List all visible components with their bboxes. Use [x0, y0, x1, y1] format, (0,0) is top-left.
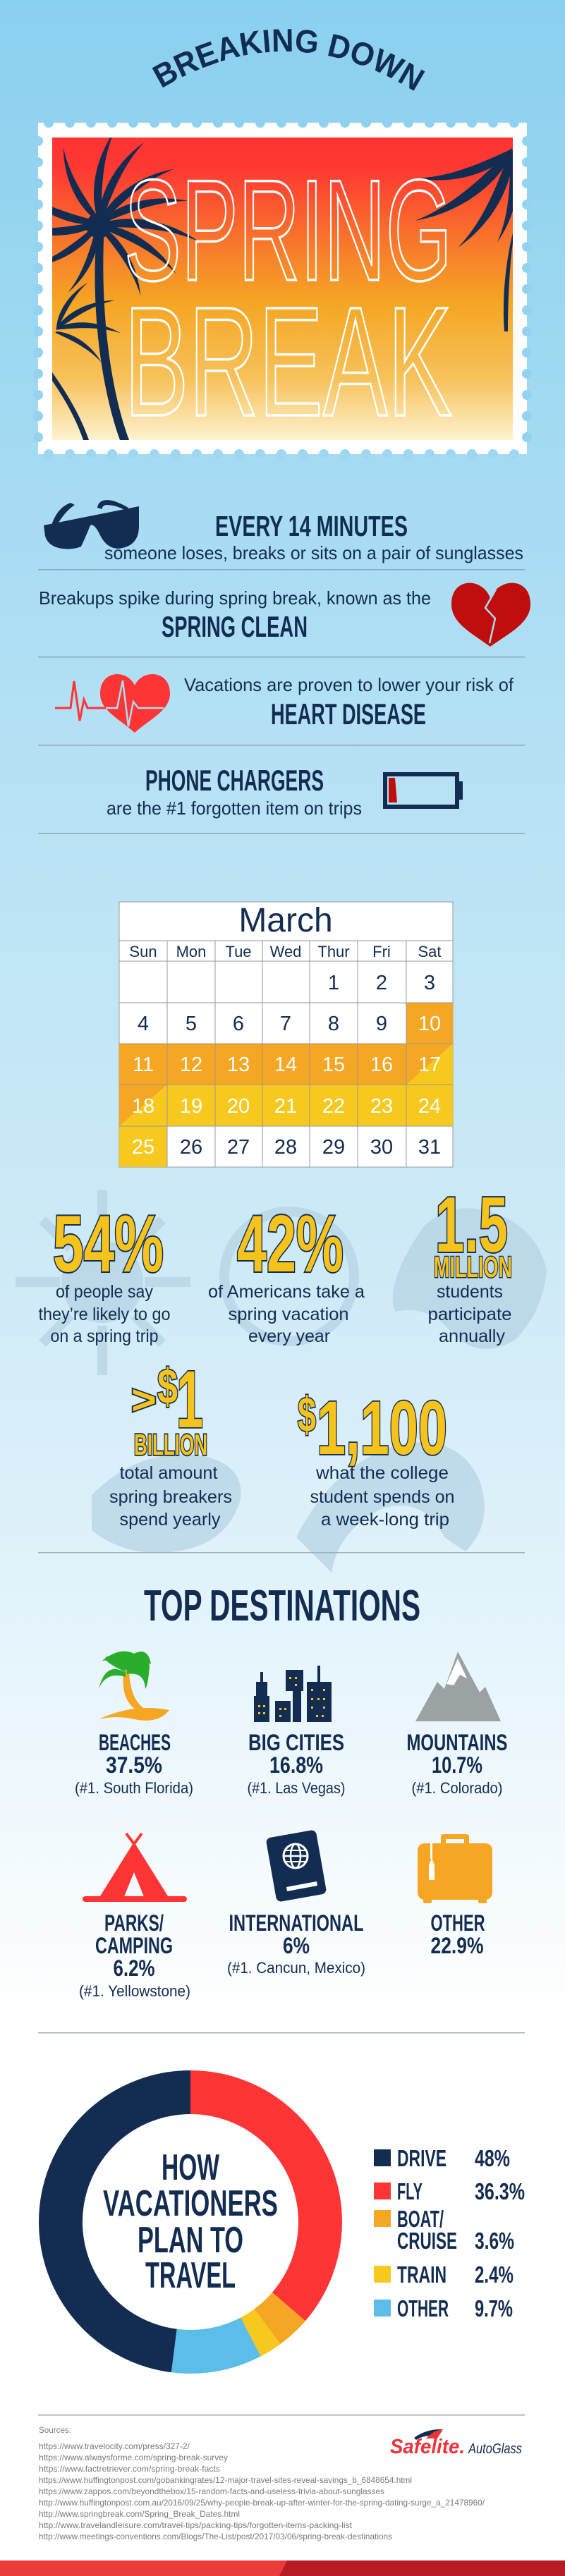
fact: phone chargers: are the #1 forgotten item on trips — [107, 798, 362, 819]
destination: international — [227, 1829, 365, 1977]
title: breaking down: BREAKING DOWN — [152, 29, 425, 91]
destination: beaches — [75, 1652, 193, 1797]
legend: TRAIN — [397, 2261, 446, 2288]
calendar: march: 30 — [370, 1136, 393, 1159]
icon: passport — [266, 1829, 327, 1903]
legend: 2.4% — [475, 2261, 514, 2288]
icon: broken heart — [451, 583, 530, 647]
calendar: march: 23 — [370, 1095, 393, 1118]
stat: $1,100: $ — [298, 1387, 316, 1442]
legend: BOAT/ — [397, 2206, 444, 2232]
calendar: march: 28 — [274, 1136, 297, 1159]
calendar: march: 7 — [280, 1013, 291, 1035]
sources: https://www.travelocity.com/press/327-2/ — [39, 2441, 190, 2451]
stat: 54%: of people say — [56, 1282, 153, 1302]
icon: tent with moon — [83, 1833, 187, 1902]
donut chart: how vacationers plan to travel: VACATIONERS — [103, 2183, 278, 2224]
calendar: march: Mon — [176, 943, 206, 960]
stat: >$1 billion: spring breakers — [109, 1487, 232, 1507]
destination: international: (#1. Cancun, Mexico) — [227, 1959, 365, 1977]
calendar: march: 14 — [274, 1054, 297, 1076]
logo: safelite autoglass: AutoGlass — [468, 2441, 522, 2457]
calendar: march: 3 — [424, 972, 435, 994]
calendar: march: 9 — [376, 1013, 387, 1035]
destination: parks/camping: 6.2% — [113, 1955, 155, 1981]
icon: mountain — [415, 1652, 501, 1721]
sources: http://www.meetings-conventions.com/Blogs/The-List/post/2017/03/06/spring-break-destinations — [39, 2532, 392, 2541]
calendar: march: 1 — [328, 972, 339, 994]
stat: 1.5 million: students — [437, 1282, 503, 1302]
calendar: march: 19 — [180, 1095, 202, 1118]
calendar: march: 17 — [418, 1054, 441, 1076]
legend — [374, 2145, 525, 2321]
stat: 42%: spring vacation — [229, 1305, 348, 1324]
calendar: march: Sun — [129, 943, 157, 960]
destination: mountains — [406, 1652, 508, 1797]
calendar: march: 21 — [274, 1095, 297, 1118]
fact: heart disease — [55, 674, 514, 733]
stat: 1.5 million: annually — [439, 1326, 505, 1346]
fact: heart disease: Vacations are proven to lower your risk of — [184, 674, 514, 695]
stat: 42%: 42% — [237, 1200, 344, 1289]
sources: http://www.springbreak.com/Spring_Break_Dates.html — [39, 2509, 240, 2519]
stamp: spring break — [6, 118, 532, 459]
fact: spring clean: SPRING CLEAN — [162, 610, 308, 643]
icon: palm tree — [99, 1652, 169, 1721]
destination: other: OTHER — [430, 1910, 485, 1936]
icon: low battery — [385, 774, 463, 807]
destination: parks/camping — [79, 1833, 190, 2000]
calendar: march: 29 — [322, 1136, 345, 1159]
calendar: march — [119, 902, 453, 1167]
destination: big cities: 16.8% — [269, 1752, 323, 1778]
stat: 54% — [38, 1200, 171, 1346]
calendar: march: 5 — [186, 1013, 197, 1035]
sources: https://www.huffingtonpost.com/gobankingrates/12-major-travel-sites-reveal-savings_b_6848654.html — [39, 2475, 412, 2485]
icon: sunglasses — [44, 500, 139, 549]
stat: 54%: on a spring trip — [51, 1326, 158, 1346]
stat: >$1 billion: 1 — [176, 1355, 203, 1445]
calendar: march: March — [238, 902, 333, 939]
stat: 54%: they’re likely to go — [38, 1305, 171, 1324]
icon: heart with ecg — [55, 674, 170, 733]
calendar: march: Sat — [418, 943, 442, 960]
icon: suitcase — [418, 1834, 492, 1903]
destination: international: INTERNATIONAL — [229, 1910, 364, 1936]
stat: 42%: every year — [248, 1326, 330, 1346]
destination: big cities — [247, 1666, 346, 1797]
calendar: march: 10 — [418, 1013, 441, 1035]
stat: 1.5 million: 1.5 — [435, 1181, 508, 1269]
fact: heart disease: HEART DISEASE — [271, 697, 426, 731]
destination: big cities: BIG CITIES — [248, 1730, 344, 1755]
text: every 14 minutes: EVERY 14 MINUTES — [215, 510, 408, 542]
logo: safelite autoglass: Safelite. — [390, 2436, 465, 2458]
stat: $1,100: student spends on — [310, 1487, 454, 1507]
destination: mountains: (#1. Colorado) — [412, 1779, 502, 1797]
destination: big cities: (#1. Las Vegas) — [247, 1779, 346, 1797]
text: SPRING BREAK outlined — [124, 150, 452, 448]
destination: beaches: 37.5% — [106, 1752, 162, 1778]
destination: other: 22.9% — [430, 1933, 484, 1958]
stat: 42%: of Americans take a — [208, 1282, 365, 1302]
footer bar — [0, 2560, 565, 2576]
donut chart: how vacationers plan to travel: TRAVEL — [145, 2255, 236, 2296]
calendar: march: 13 — [227, 1054, 250, 1076]
calendar: march: Fri — [372, 943, 391, 960]
destination: mountains: MOUNTAINS — [406, 1730, 508, 1755]
heading: top destinations: TOP DESTINATIONS — [144, 1582, 420, 1630]
destination: mountains: 10.7% — [432, 1752, 482, 1778]
stat: 54%: 54% — [53, 1200, 164, 1289]
stat: $1,100: a week-long trip — [321, 1510, 449, 1530]
logo: safelite autoglass — [390, 2429, 522, 2458]
destination: international: 6% — [283, 1933, 310, 1958]
stat: 1.5 million — [427, 1181, 512, 1346]
stat: $1,100: 1,100 — [317, 1385, 447, 1470]
calendar: march: 25 — [132, 1136, 154, 1159]
calendar: march: 8 — [328, 1013, 339, 1035]
sources: https://www.alwaysforme.com/spring-break-survey — [39, 2453, 228, 2462]
donut chart: how vacationers plan to travel: HOW — [162, 2147, 220, 2188]
stat: 1.5 million: participate — [427, 1305, 512, 1324]
calendar: march: 26 — [180, 1136, 202, 1159]
calendar: march: 24 — [418, 1095, 441, 1118]
legend: DRIVE — [397, 2145, 446, 2171]
destination: parks/camping: PARKS/ — [104, 1910, 164, 1936]
stat: >$1 billion: total amount — [120, 1463, 218, 1483]
stat: 1.5 million: MILLION — [434, 1250, 512, 1283]
sources: http://www.huffingtonpost.com.au/2016/09/25/why-people-break-up-after-winter-for-the-spring-dating-surge_a_21478960/ — [39, 2498, 485, 2508]
destination: other — [418, 1834, 492, 1958]
legend: CRUISE — [397, 2228, 457, 2254]
stat: $1,100 — [298, 1385, 454, 1530]
calendar: march: 6 — [233, 1013, 244, 1035]
stat: 42% — [208, 1200, 365, 1346]
background icons: faint beach doodles — [16, 1190, 547, 1573]
calendar: march: 2 — [376, 972, 387, 994]
icon: city skyline — [254, 1666, 332, 1722]
legend: FLY — [397, 2178, 423, 2204]
palm trees — [6, 130, 528, 440]
stat: >$1 billion: BILLION — [134, 1428, 207, 1461]
destination: parks/camping: (#1. Yellowstone) — [79, 1982, 190, 2000]
calendar: march: 16 — [370, 1054, 393, 1076]
fact: phone chargers: PHONE CHARGERS — [145, 764, 324, 797]
calendar: march: 31 — [418, 1136, 441, 1159]
sources: Sources: — [39, 2425, 71, 2435]
destination: beaches: (#1. South Florida) — [75, 1779, 193, 1797]
calendar: march: Thur — [317, 943, 350, 960]
calendar: march: 4 — [138, 1013, 149, 1035]
fact: phone chargers — [107, 764, 463, 819]
stat: >$1 billion: spend yearly — [120, 1510, 221, 1530]
calendar: march: 15 — [322, 1054, 345, 1076]
legend: 36.3% — [475, 2178, 525, 2204]
legend: OTHER — [397, 2295, 449, 2321]
stat: >$1 billion: > — [131, 1377, 157, 1423]
stat: >$1 billion — [109, 1355, 232, 1530]
calendar: march: 12 — [180, 1054, 202, 1076]
sources: https://www.factretriever.com/spring-break-facts — [39, 2464, 220, 2474]
calendar: march: Wed — [270, 943, 301, 960]
calendar: march: 27 — [227, 1136, 250, 1159]
destination: beaches: BEACHES — [99, 1730, 171, 1755]
legend: 3.6% — [475, 2228, 514, 2254]
calendar: march: 18 — [132, 1095, 154, 1118]
fact: spring clean — [39, 583, 530, 647]
sources — [39, 2425, 485, 2541]
calendar: march: 20 — [227, 1095, 250, 1118]
fact: sunglasses: someone loses, breaks or sits on a pair of sunglasses — [104, 542, 523, 563]
stat: $1,100: what the college — [315, 1463, 449, 1483]
fact: sunglasses — [44, 500, 523, 563]
calendar: march: 11 — [133, 1054, 154, 1076]
stat: >$1 billion: $ — [157, 1359, 178, 1414]
fact: spring clean: Breakups spike during spring break, known as the — [39, 587, 431, 609]
legend: 48% — [475, 2145, 510, 2171]
legend: 9.7% — [475, 2295, 513, 2321]
sources: http://www.travelandleisure.com/travel-tips/packing-tips/forgotten-items-packing-list — [39, 2520, 353, 2530]
donut chart: how vacationers plan to travel: PLAN TO — [138, 2220, 243, 2261]
sources: https://www.zappos.com/beyondthebox/15-random-facts-and-useless-trivia-about-sunglasses — [39, 2486, 384, 2496]
destination: parks/camping: CAMPING — [95, 1933, 173, 1958]
donut chart: how vacationers plan to travel — [61, 2092, 320, 2352]
calendar: march: 22 — [322, 1095, 345, 1118]
calendar: march: Tue — [225, 943, 252, 960]
